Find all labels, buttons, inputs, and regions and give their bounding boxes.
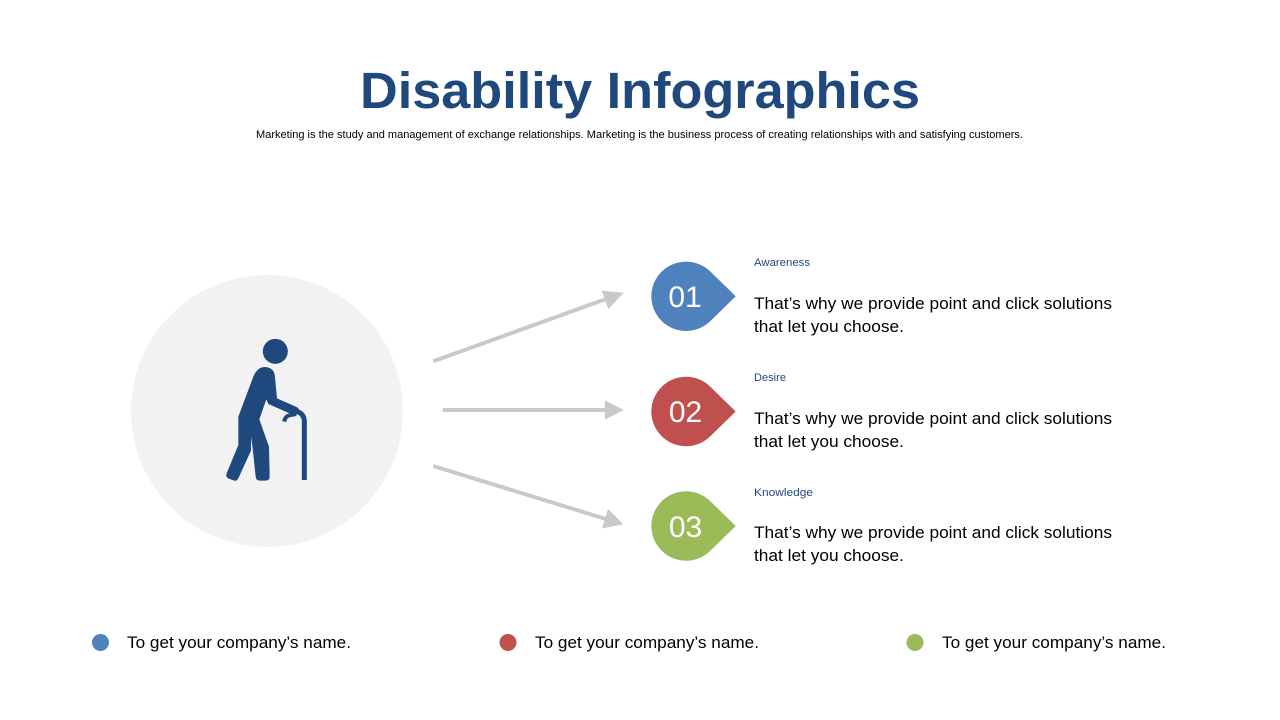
arrow: top (433, 291, 624, 361)
description: that let you choose. (754, 433, 904, 451)
arrow: middle (443, 400, 624, 420)
description: That’s why we provide point and click solutions (754, 295, 1112, 313)
subtitle: Marketing is the study and management of exchange relationships. Marketing is the business process of creating relationships with and satisfying customers. (256, 129, 1023, 141)
background circle (131, 275, 403, 547)
legend item: blue: To get your company’s name. (127, 634, 351, 652)
badge 03 (651, 491, 736, 561)
description (754, 410, 1112, 451)
item 02: Desire (651, 372, 1112, 451)
title: Disability Infographics (360, 62, 920, 119)
legend item: green: To get your company’s name. (942, 634, 1166, 652)
badge 03: 03 (669, 511, 702, 544)
legend item: red: To get your company’s name. (535, 634, 759, 652)
item 03: Knowledge (651, 487, 1112, 565)
description (754, 295, 1112, 336)
badge 01: 01 (668, 281, 702, 314)
arrow: bottom (433, 466, 623, 528)
label: Awareness (754, 257, 811, 269)
badge 02 (651, 377, 736, 446)
label: Desire (754, 372, 786, 384)
description: that let you choose. (754, 547, 904, 565)
description (754, 524, 1112, 565)
badge 01 (651, 262, 736, 331)
icon: elderly person with cane (226, 339, 304, 481)
item 01: Awareness (651, 257, 1112, 336)
description: That’s why we provide point and click solutions (754, 410, 1112, 428)
description: that let you choose. (754, 318, 904, 336)
label: Knowledge (754, 487, 813, 499)
panel: person illustration (131, 275, 403, 547)
description: That’s why we provide point and click solutions (754, 524, 1112, 542)
badge 02: 02 (669, 396, 702, 429)
